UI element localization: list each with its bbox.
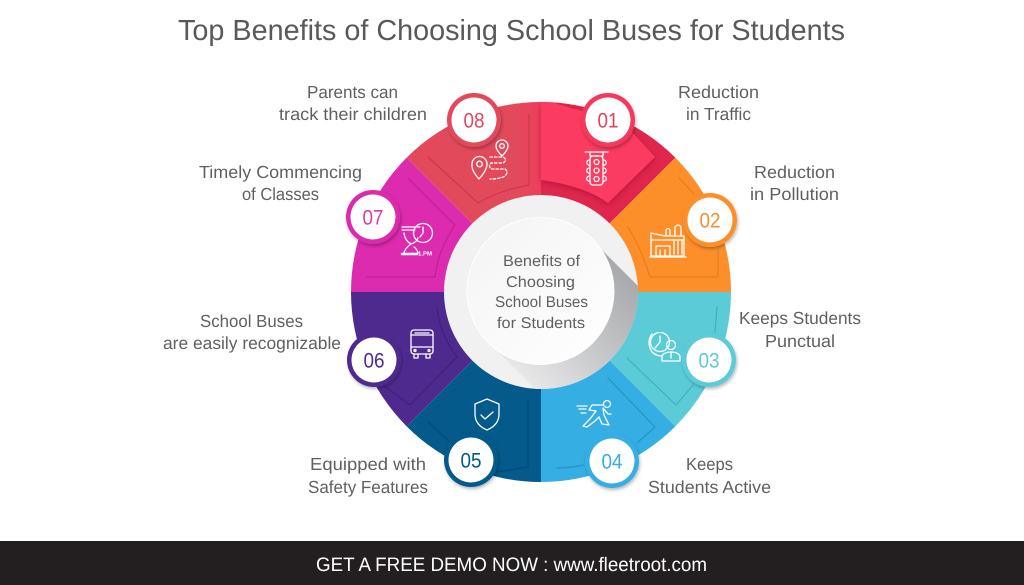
- segment 01: [541, 102, 675, 292]
- fold 04: [557, 378, 655, 468]
- hub text: for Students: [497, 315, 585, 332]
- label 05: Equipped with: [310, 454, 426, 474]
- footer bar: [0, 541, 1024, 585]
- label 02: in Pollution: [750, 184, 839, 204]
- label 05: Safety Features: [308, 477, 428, 497]
- label 07: Timely Commencing: [199, 162, 362, 182]
- fold 03: [627, 307, 717, 405]
- label 03: Punctual: [765, 331, 835, 351]
- badge 03: 03: [698, 350, 720, 372]
- label 06: are easily recognizable: [163, 333, 341, 353]
- badge 01: 01: [598, 110, 618, 132]
- badge 04: 04: [602, 450, 623, 474]
- label 08: Parents can: [307, 82, 398, 102]
- icon: factory: [650, 225, 686, 257]
- badge 06: [347, 333, 401, 387]
- segment 08: [407, 102, 541, 292]
- label 07: of Classes: [242, 184, 319, 204]
- hub text: [495, 253, 588, 332]
- badge 08: 08: [464, 110, 484, 132]
- badge 04: [585, 434, 639, 488]
- segment 06: [351, 292, 541, 426]
- badge 07: [346, 190, 400, 244]
- badge 07: 07: [362, 206, 384, 230]
- badge 05: 05: [460, 450, 482, 472]
- label 03: [739, 308, 861, 351]
- icon: clock and person: [649, 332, 680, 361]
- icon: bus: [411, 330, 433, 358]
- hub long shadow: [499, 250, 638, 389]
- label 02: [750, 162, 839, 204]
- badge 05: [444, 433, 498, 487]
- label 01: Reduction: [678, 82, 759, 102]
- label 05: [308, 454, 428, 497]
- segment 07: [351, 158, 541, 292]
- label 03: Keeps Students: [739, 308, 861, 328]
- icon: hourglass and clock: 1.PM: [418, 250, 432, 258]
- label 06: School Buses: [200, 311, 303, 331]
- hub ring: [444, 195, 638, 389]
- badge 01: [581, 93, 635, 147]
- label 04: [648, 454, 771, 497]
- icon: map route: [472, 140, 508, 179]
- hub text: Choosing: [506, 274, 575, 291]
- fold 01: [541, 102, 655, 203]
- icon: shield: [475, 399, 499, 430]
- fold 05: [428, 400, 528, 472]
- fold 06: [383, 307, 457, 405]
- fold 08: [428, 115, 529, 203]
- icon: running student: [577, 400, 611, 427]
- label 02: Reduction: [754, 162, 835, 182]
- fold 07: [367, 178, 455, 277]
- icon: hourglass and clock: [402, 224, 432, 258]
- label 08: [279, 82, 427, 124]
- hub disk: [467, 218, 614, 364]
- segment 04: [541, 292, 675, 482]
- segment 03: [541, 292, 731, 426]
- segment 05: [407, 292, 541, 482]
- fold 02: [628, 178, 718, 277]
- label 01: in Traffic: [686, 104, 751, 124]
- badge 08: [447, 93, 501, 147]
- label 04: Keeps: [686, 454, 733, 474]
- icon: traffic light: [585, 152, 608, 185]
- label 08: track their children: [279, 104, 427, 124]
- wheel diagram: [346, 93, 737, 488]
- label 04: Students Active: [648, 477, 771, 497]
- title: Top Benefits of Choosing School Buses for Students: [178, 15, 845, 47]
- label 06: [163, 311, 341, 353]
- label 01: [678, 82, 759, 124]
- badge 02: [683, 193, 737, 247]
- hub text: School Buses: [495, 294, 588, 311]
- segment 02: [541, 158, 731, 292]
- footer call to action: GET A FREE DEMO NOW : www.fleetroot.com: [316, 554, 707, 576]
- hub text: Benefits of: [503, 253, 581, 270]
- badge 03: [682, 333, 736, 387]
- badge 06: 06: [364, 350, 384, 372]
- badge 02: 02: [700, 210, 720, 232]
- label 07: [199, 162, 362, 204]
